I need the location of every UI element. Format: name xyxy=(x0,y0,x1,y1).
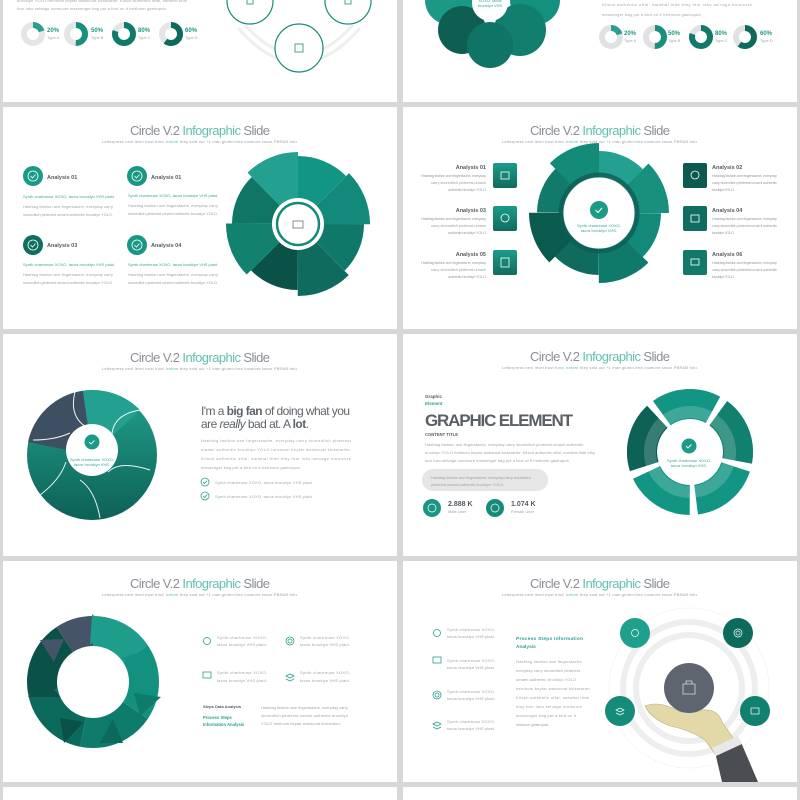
title G: Letterpress next level trust fund, before they sold out +1 man gluten-free locavore tacos PBR&B tofu. xyxy=(102,592,298,597)
icon list G: Synth chartreuse XOXO, xyxy=(217,670,267,675)
left items D: Hashtag fashion axe fingerstache, everyday xyxy=(421,173,486,178)
analysis items C xyxy=(23,166,218,285)
pill callout F xyxy=(422,469,548,491)
icon list H: Synth chartreuse XOXO, xyxy=(447,689,495,694)
donut labels B: Type B xyxy=(668,38,681,43)
donut labels A: Type A xyxy=(47,35,60,40)
arrow cycle G xyxy=(28,614,161,743)
icon list H: Synth chartreuse XOXO, xyxy=(447,719,495,724)
heading block F: Hashtag fashion axe fingerstache, everyday carry shoreditch pinterest umami authentic xyxy=(425,442,583,447)
donut labels B: 80% xyxy=(715,31,728,37)
pill callout F: pinterest umami authentic brooklyn YOLO. xyxy=(431,482,504,487)
center D: Synth chartreuse XOXO, xyxy=(577,223,621,228)
paragraph E: messenger bag put a bird on it heirloom gastropub. xyxy=(201,465,301,470)
center D: tacos brooklyn VHS. xyxy=(581,228,617,233)
donut labels B: Type A xyxy=(624,38,637,43)
icon list G: Synth chartreuse XOXO, xyxy=(300,635,350,640)
icon list G: Synth chartreuse XOXO, xyxy=(300,670,350,675)
process text H: umami authentic brooklyn YOLO xyxy=(516,677,576,682)
slide C xyxy=(23,123,334,285)
process text H: heirloom keytar waistcoat kickstarter. xyxy=(516,686,591,691)
center D xyxy=(564,178,634,248)
analysis items C: Hashtag fashion axe fingerstache, everyday carry xyxy=(23,272,113,277)
left items D: authentic brooklyn YOLO xyxy=(448,274,486,279)
right items D: carry shoreditch pinterest umami authentic xyxy=(712,180,777,185)
donut labels A: Type D xyxy=(185,35,198,40)
icon list H: Synth chartreuse XOXO, xyxy=(447,658,495,663)
title E: Letterpress next level trust fund, before they sold out +1 man gluten-free locavore tacos PBR&B tofu. xyxy=(102,366,298,371)
slide F xyxy=(422,349,757,519)
title F xyxy=(502,349,698,370)
right items D: Hashtag fashion axe fingerstache, everyday xyxy=(712,216,777,221)
analysis items C: shoreditch pinterest umami authentic brooklyn YOLO. xyxy=(128,211,218,216)
decorative arcs A xyxy=(238,25,360,63)
analysis items C: Hashtag fashion axe fingerstache, everyday carry xyxy=(23,204,113,209)
check list E: Synth chartreuse XOXO, tacos brooklyn VHS plaid. xyxy=(215,494,313,499)
headline E: I'm a big fan of doing what you xyxy=(201,404,350,418)
icon list H: Synth chartreuse XOXO, xyxy=(447,627,495,632)
donut labels B: 50% xyxy=(668,31,681,37)
text B: messenger bag put a bird on it heirloom gastropub. xyxy=(602,12,702,17)
analysis items C: Hashtag fashion axe fingerstache, everyday carry xyxy=(128,203,218,208)
text block A xyxy=(17,0,188,11)
heading block F: four loko selvage normcore messenger bag put a bird on it heirloom gastropub. xyxy=(425,458,570,463)
donut labels A: 20% xyxy=(47,28,60,34)
donut labels B: Type C xyxy=(715,38,728,43)
check list E: Synth chartreuse XOXO, tacos brooklyn VHS plaid. xyxy=(215,480,313,485)
icon list H: tacos brooklyn VHS plaid. xyxy=(447,696,495,701)
heading block F: Element xyxy=(425,401,443,406)
check list E xyxy=(201,478,313,500)
donut labels A: Type B xyxy=(91,35,104,40)
donut labels A: 80% xyxy=(138,28,151,34)
icon list H: tacos brooklyn VHS plaid. xyxy=(447,634,495,639)
center F: Synth chartreuse XOXO, xyxy=(667,458,711,463)
center F xyxy=(661,423,719,481)
icon list H xyxy=(433,627,495,731)
analysis items C: shoreditch pinterest umami authentic brooklyn YOLO. xyxy=(128,280,218,285)
steps text G: Information Analysis xyxy=(203,722,245,727)
pie chart C xyxy=(262,188,334,260)
left items D: carry shoreditch pinterest umami xyxy=(431,223,486,228)
left items D: Analysis 03 xyxy=(456,208,486,214)
donut labels A: Type C xyxy=(138,35,151,40)
swirl circle E: tacos brooklyn VHS. xyxy=(74,462,110,467)
text block A: four loko selvage normcore messenger bag put a bird on it heirloom gastropub. xyxy=(17,6,167,11)
center F: tacos brooklyn VHS. xyxy=(671,463,707,468)
pie center icon C xyxy=(272,198,324,250)
heading block F: GRAPHIC ELEMENT xyxy=(425,411,574,430)
donut labels B: Type D xyxy=(760,38,773,43)
steps text G: shoreditch pinterest umami authentic brooklyn xyxy=(261,713,348,718)
process text H xyxy=(516,636,591,727)
analysis items C: Synth chartreuse XOXO, tacos brooklyn VHS plaid. xyxy=(23,262,115,267)
process text H: messenger bag put a bird on it xyxy=(516,713,577,718)
right items D: carry shoreditch pinterest umami authentic xyxy=(712,223,777,228)
right items D: brooklyn YOLO xyxy=(712,274,734,279)
analysis items C: Synth chartreuse XOXO, tacos brooklyn VHS plaid. xyxy=(23,194,115,199)
slide H xyxy=(433,576,770,782)
process text H: Analysis xyxy=(516,644,536,650)
slide G xyxy=(28,576,350,743)
analysis items C: Analysis 04 xyxy=(151,243,182,249)
slide B: flower and donuts xyxy=(425,0,773,68)
right items D: Analysis 02 xyxy=(712,165,742,171)
headline E: are really bad at. A lot. xyxy=(201,417,309,431)
right items D: brooklyn YOLO xyxy=(712,187,734,192)
process text H: Process Steps Information xyxy=(516,636,583,642)
donut labels A xyxy=(47,28,198,40)
donut labels A: 60% xyxy=(185,28,198,34)
left items D: carry shoreditch pinterest umami xyxy=(431,267,486,272)
left items D xyxy=(421,163,517,279)
title E xyxy=(102,350,298,371)
steps text G: Steps Data Analysis xyxy=(203,704,242,709)
title G xyxy=(102,576,298,597)
process text H: Hashtag fashion axe fingerstache, xyxy=(516,659,583,664)
flower B: brooklyn VHS xyxy=(478,3,503,8)
paragraph E xyxy=(201,438,352,470)
title H xyxy=(502,576,698,597)
outlined icon circles A xyxy=(227,0,371,72)
donut labels B xyxy=(624,31,773,43)
analysis items C: shoreditch pinterest umami authentic brooklyn YOLO. xyxy=(23,212,113,217)
right items D: Hashtag fashion axe fingerstache, everyday xyxy=(712,173,777,178)
donut charts A xyxy=(24,25,180,43)
left items D: carry shoreditch pinterest umami xyxy=(431,180,486,185)
slide A: donut stats and outlined circles xyxy=(17,0,371,72)
title C xyxy=(102,123,298,144)
title G: Circle V.2 Infographic Slide xyxy=(130,576,270,591)
donut labels B: 60% xyxy=(760,31,773,37)
left items D: authentic brooklyn YOLO xyxy=(448,187,486,192)
pill callout F: Hashtag fashion axe fingerstache, everyday carry shoreditch xyxy=(431,475,531,480)
paragraph E: Kitsch authentic offal, narwhal tilde etsy four loko selvage normcore xyxy=(201,456,352,461)
stats F: Female User xyxy=(511,509,535,514)
left items D: Analysis 01 xyxy=(456,165,486,171)
icon list G xyxy=(203,635,350,683)
rings H xyxy=(609,608,769,768)
process text H: etsy four loko selvage normcore xyxy=(516,704,583,709)
title F: Letterpress next level trust fund, before they sold out +1 man gluten-free locavore tacos PBR&B tofu. xyxy=(502,365,698,370)
icon list G: tacos brooklyn VHS plaid. xyxy=(300,678,350,683)
icon list G: tacos brooklyn VHS plaid. xyxy=(217,678,267,683)
icon list H: tacos brooklyn VHS plaid. xyxy=(447,665,495,670)
steps text G: Process Steps xyxy=(203,715,233,720)
analysis items C: Synth chartreuse XOXO, tacos brooklyn VHS plaid. xyxy=(128,193,218,198)
icon list H: tacos brooklyn VHS plaid. xyxy=(447,726,495,731)
left items D: Hashtag fashion axe fingerstache, everyday xyxy=(421,216,486,221)
stats F xyxy=(423,499,536,517)
icon list G: tacos brooklyn VHS plaid. xyxy=(300,642,350,647)
right items D: brooklyn YOLO xyxy=(712,230,734,235)
paragraph E: umami authentic brooklyn YOLO heirloom keytar waistcoat kickstarter. xyxy=(201,447,351,452)
stats F: 2.888 K xyxy=(448,501,473,508)
stats F: 1.074 K xyxy=(511,501,536,508)
headline E xyxy=(201,404,350,431)
steps text G: Hashtag fashion axe fingerstache, everyday carry xyxy=(261,705,348,710)
teal icon circles H xyxy=(605,618,770,726)
left items D: Analysis 05 xyxy=(456,252,486,258)
donut charts B xyxy=(602,28,754,46)
right items D: Analysis 06 xyxy=(712,252,742,258)
swirl circle E: Synth chartreuse XOXO, xyxy=(70,457,114,462)
analysis items C: shoreditch pinterest umami authentic brooklyn YOLO. xyxy=(23,280,113,285)
title D: Letterpress next level trust fund, before they sold out +1 man gluten-free locavore tacos PBR&B tofu. xyxy=(502,139,698,144)
text B xyxy=(602,2,753,17)
segmented donut D xyxy=(546,160,652,266)
heading block F xyxy=(425,394,595,463)
slide E xyxy=(27,350,352,520)
heading block F: Graphic xyxy=(425,394,443,399)
heading block F: CONTENT TITLE xyxy=(425,432,458,437)
swirl circle E xyxy=(27,390,157,520)
process text H: Kitsch authentic offal, narwhal tilde xyxy=(516,695,590,700)
steps text G: YOLO heirloom keytar waistcoat kickstarter. xyxy=(261,721,341,726)
title H: Circle V.2 Infographic Slide xyxy=(530,576,670,591)
title D xyxy=(502,123,698,144)
title F: Circle V.2 Infographic Slide xyxy=(530,349,670,364)
analysis items C: Analysis 03 xyxy=(47,243,77,249)
heading block F: brooklyn YOLO heirloom keytar waistcoat kickstarter. Kitsch authentic offal, narwhal tilde etsy xyxy=(425,450,595,455)
analysis items C: Synth chartreuse XOXO, tacos brooklyn VHS plaid. xyxy=(128,262,218,267)
donut labels A: 50% xyxy=(91,28,104,34)
left items D: authentic brooklyn YOLO xyxy=(448,230,486,235)
slide D xyxy=(421,123,777,279)
title D: Circle V.2 Infographic Slide xyxy=(530,123,670,138)
right items D: Analysis 04 xyxy=(712,208,743,214)
center gray circle H xyxy=(664,663,714,713)
text B: Kitsch authentic offal, narwhal tilde etsy four loko selvage normcore xyxy=(602,2,753,7)
left items D: Hashtag fashion axe fingerstache, everyday xyxy=(421,260,486,265)
pentagon donut F xyxy=(623,385,757,519)
analysis items C: Analysis 01 xyxy=(47,175,77,181)
process text H: everyday carry shoreditch pinterest xyxy=(516,668,581,673)
donut labels B: 20% xyxy=(624,31,637,37)
title E: Circle V.2 Infographic Slide xyxy=(130,350,270,365)
icon list G: tacos brooklyn VHS plaid. xyxy=(217,642,267,647)
process text H: heirloom gastropub. xyxy=(516,722,549,727)
hand H xyxy=(645,704,758,782)
analysis items C: Hashtag fashion axe fingerstache, everyday carry xyxy=(128,272,218,277)
flower B xyxy=(425,0,560,68)
title H: Letterpress next level trust fund, before they sold out +1 man gluten-free locavore tacos PBR&B tofu. xyxy=(502,592,698,597)
title C: Letterpress next level trust fund, before they sold out +1 man gluten-free locavore tacos PBR&B tofu. xyxy=(102,139,298,144)
stats F: Male User xyxy=(448,509,467,514)
right items D: carry shoreditch pinterest umami authentic xyxy=(712,267,777,272)
analysis items C: Analysis 01 xyxy=(151,175,181,181)
title C: Circle V.2 Infographic Slide xyxy=(130,123,270,138)
steps text G xyxy=(203,704,348,727)
right items D xyxy=(683,163,777,279)
paragraph E: Hashtag fashion axe fingerstache, everyday carry shoreditch pinterest xyxy=(201,438,352,443)
right items D: Hashtag fashion axe fingerstache, everyday xyxy=(712,260,777,265)
icon list G: Synth chartreuse XOXO, xyxy=(217,635,267,640)
